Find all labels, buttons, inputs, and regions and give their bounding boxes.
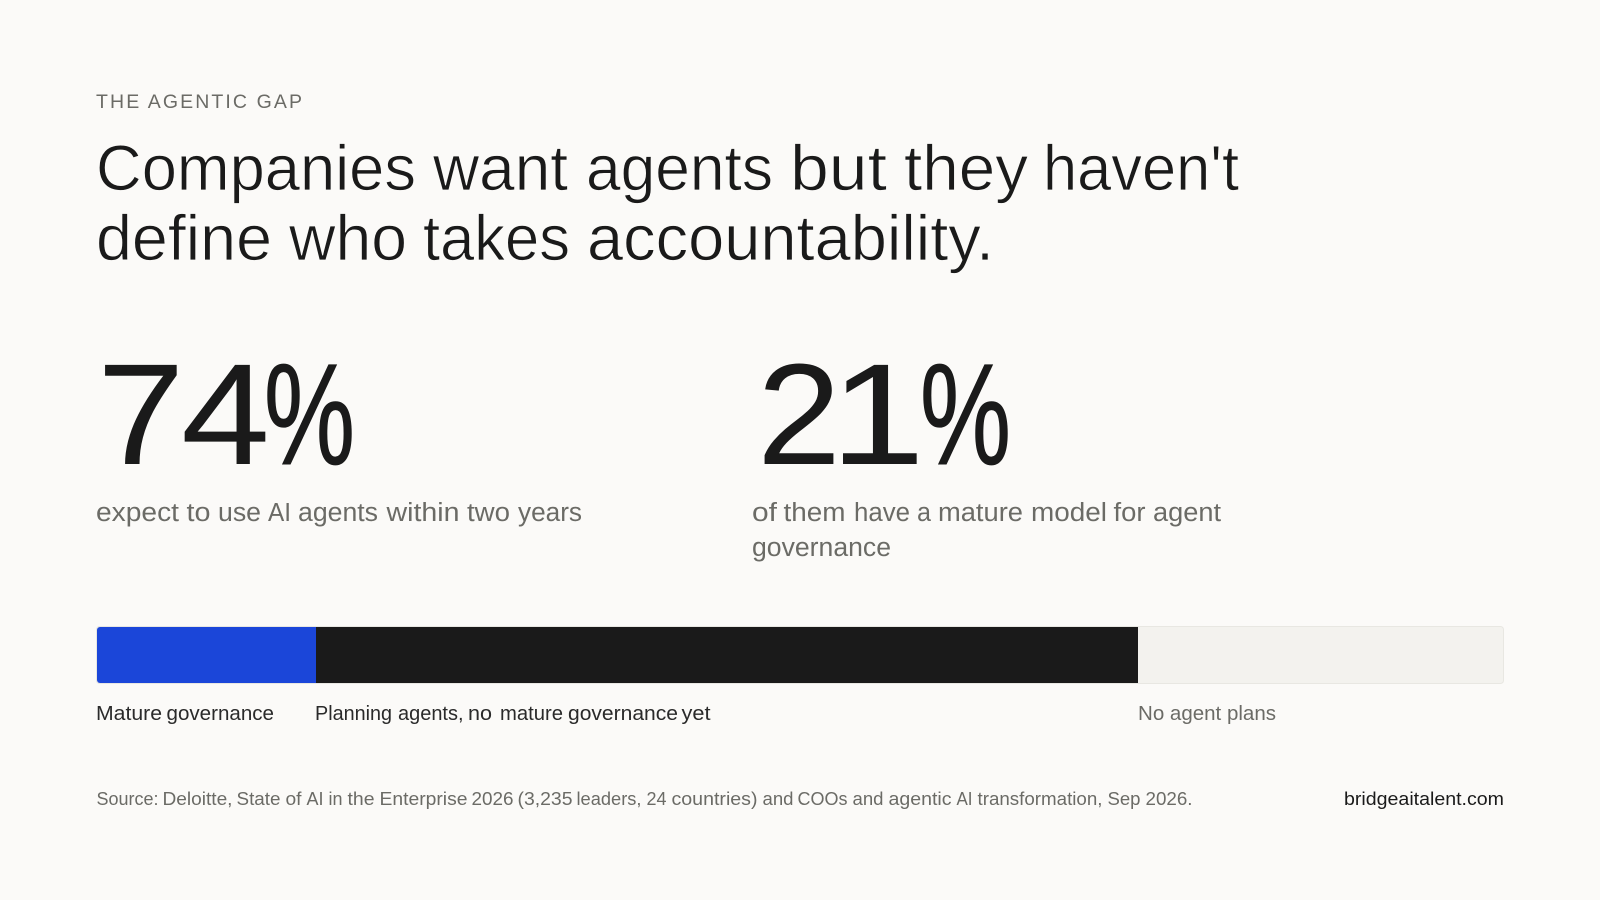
- source note: of: [286, 789, 303, 809]
- stat: 74%: 4: [181, 334, 270, 495]
- source note: leaders,: [576, 789, 642, 809]
- source note: (3,235: [518, 789, 572, 809]
- source note: State: [236, 789, 280, 809]
- title: haven't: [1043, 132, 1239, 204]
- stat: 21%: 1: [830, 334, 925, 495]
- source note: Enterprise: [380, 789, 468, 809]
- title: define: [96, 202, 272, 274]
- bar segment: planning agents: [316, 627, 1138, 683]
- bar segment: mature governance: [97, 627, 316, 683]
- stat: 74%: 7: [97, 334, 185, 495]
- source note: 2026.: [1146, 789, 1192, 809]
- title: takes: [423, 202, 570, 274]
- source note: the: [348, 789, 374, 809]
- stat caption: 21%: model: [1031, 499, 1107, 527]
- stat caption: 74%: within: [385, 499, 460, 527]
- stat caption: 21%: have: [854, 499, 910, 527]
- stat caption: 74%: agents: [298, 499, 378, 527]
- legend label: mature governance: Mature: [96, 703, 162, 725]
- stat caption: 74%: years: [518, 499, 582, 527]
- stat caption: 21%: them: [784, 499, 846, 527]
- source note: COOs: [798, 789, 848, 809]
- stat caption: 21%: a: [917, 499, 932, 527]
- stat caption: 74%: AI: [268, 499, 291, 527]
- stat caption: 21%: [752, 499, 1221, 562]
- stat: 21%: 2: [757, 334, 841, 495]
- stat caption: 74%: to: [186, 499, 210, 527]
- title: Companies: [96, 132, 416, 204]
- legend label: planning agents: no: [468, 703, 492, 725]
- legend label: no agent plans: No agent plans: [1138, 703, 1276, 725]
- title: but: [790, 132, 887, 204]
- source note: AI: [306, 789, 324, 809]
- source note: countries): [672, 789, 758, 809]
- legend label: planning agents: mature: [500, 703, 563, 725]
- stat caption: 74%: expect: [96, 499, 179, 527]
- source note: agentic: [888, 789, 952, 809]
- legend label: planning agents: yet: [682, 703, 711, 725]
- source note: Source:: [96, 789, 158, 809]
- legend label: planning agents: agents,: [398, 703, 464, 725]
- title: agents: [586, 132, 773, 204]
- title: accountability.: [587, 202, 994, 274]
- source note: AI: [956, 789, 972, 809]
- source note: in: [328, 789, 342, 809]
- source note: and: [852, 789, 884, 809]
- stat caption: 74%: two: [467, 499, 510, 527]
- source note: transformation,: [978, 789, 1102, 809]
- eyebrow label: THE AGENTIC GAP: [96, 91, 302, 113]
- legend label: mature governance: governance: [166, 703, 274, 725]
- stat caption: 21%: agent: [1153, 499, 1221, 527]
- title: who: [288, 202, 407, 274]
- stat: 74%: [96, 334, 582, 527]
- website credit: bridgeaitalent.com: [1344, 789, 1504, 809]
- legend label: planning agents: governance: [568, 703, 678, 725]
- bar segment: no agent plans: [96, 626, 1504, 684]
- source note: Sep: [1108, 789, 1140, 809]
- legend label: planning agents: Planning: [315, 703, 392, 725]
- stat caption: 21%: mature: [938, 499, 1023, 527]
- stat caption: 74%: use: [218, 499, 261, 527]
- stat: 21%: %: [920, 334, 1011, 495]
- stat: 74%: %: [264, 334, 355, 495]
- source note: 24: [646, 789, 666, 809]
- source note: 2026: [472, 789, 514, 809]
- source note: and: [762, 789, 794, 809]
- source note: Deloitte,: [162, 789, 232, 809]
- title: want: [432, 132, 568, 204]
- stacked bar chart: [96, 626, 1504, 684]
- stat caption: 21%: for: [1114, 499, 1146, 527]
- legend: [96, 703, 1276, 725]
- title: they: [904, 132, 1028, 204]
- title: [96, 132, 1239, 274]
- stat caption: 21%: governance: [752, 534, 891, 562]
- stat caption: 21%: of: [752, 499, 778, 527]
- stat: 21%: [752, 334, 1221, 562]
